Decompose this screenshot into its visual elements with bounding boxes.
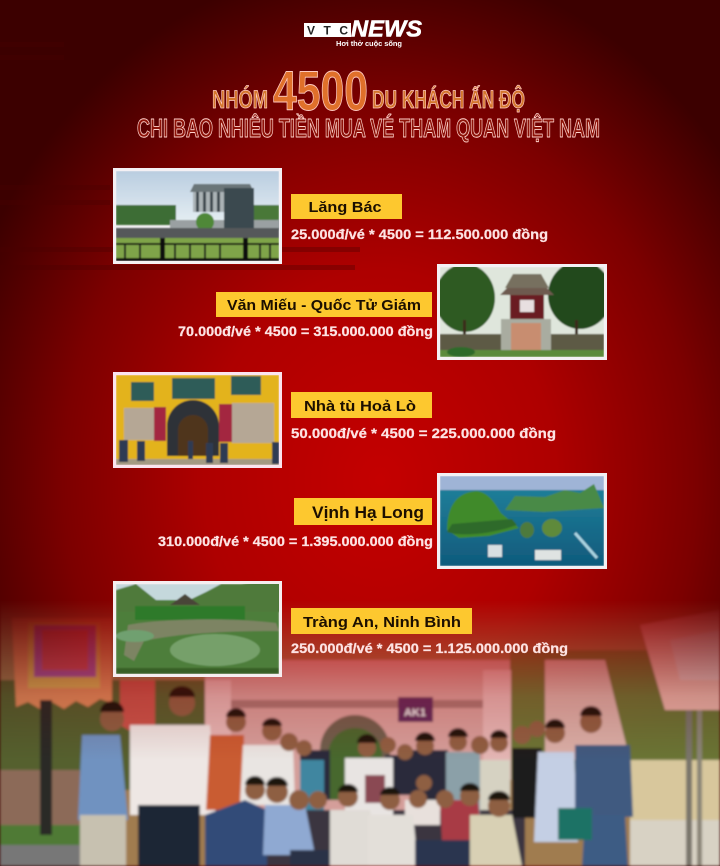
logo: VTC News: NEWS (351, 16, 423, 42)
right banner (640, 610, 720, 710)
back row (300, 750, 448, 802)
photo: Hạ Long (437, 473, 607, 569)
title (137, 59, 600, 143)
title: NHÓM (212, 84, 268, 114)
panel: Nhà tù Hoả Lò (113, 372, 556, 468)
title: 4500 (273, 59, 368, 122)
panel: Vịnh Hạ Long (158, 473, 607, 569)
bottom group photo (0, 600, 720, 866)
photo: Hoả Lò (113, 372, 282, 468)
panel: Văn Miếu (178, 261, 612, 360)
label: Hạ Long: Vịnh Hạ Long (312, 504, 424, 522)
formula: Lăng Bác: 25.000đ/vé * 4500 = 112.500.000 đồng (291, 226, 548, 242)
formula: Hoả Lò: 50.000đ/vé * 4500 = 225.000.000 đồng (291, 425, 556, 441)
panel: Lăng Bác (113, 168, 548, 264)
label: Hạ Long (294, 498, 432, 525)
label: Văn Miếu: Văn Miếu - Quốc Tử Giám (227, 297, 421, 314)
label: Tràng An: Tràng An, Ninh Bình (303, 614, 461, 631)
label: Lăng Bác: Lăng Bác (308, 199, 382, 216)
logo: VTC News (304, 16, 423, 48)
label: Lăng Bác (291, 194, 402, 219)
formula: Văn Miếu: 70.000đ/vé * 4500 = 315.000.000 đồng (178, 323, 433, 339)
label: Hoả Lò (291, 392, 432, 418)
label: Tràng An (291, 608, 472, 634)
front row (205, 800, 267, 866)
panel: Tràng An (113, 581, 568, 677)
photo: Tràng An (113, 581, 299, 677)
logo: VTC News: Hơi thở cuộc sống (336, 39, 402, 48)
sign AK1 (398, 697, 433, 722)
heads (100, 690, 602, 817)
left men (78, 735, 128, 820)
label: Hoả Lò: Nhà tù Hoả Lò (304, 398, 416, 415)
logo: VTC News: VTC (307, 24, 348, 38)
photo: Văn Miếu (435, 261, 612, 360)
title: DU KHÁCH ẤN ĐỘ (372, 84, 525, 114)
formula: Hạ Long: 310.000đ/vé * 4500 = 1.395.000.000 đồng (158, 533, 433, 549)
label: Văn Miếu (216, 292, 432, 317)
left banner (12, 618, 112, 709)
photo: Lăng Bác (113, 168, 282, 264)
formula: Tràng An: 250.000đ/vé * 4500 = 1.125.000.000 đồng (291, 640, 568, 656)
bottom group photo: AK1 (404, 707, 426, 719)
